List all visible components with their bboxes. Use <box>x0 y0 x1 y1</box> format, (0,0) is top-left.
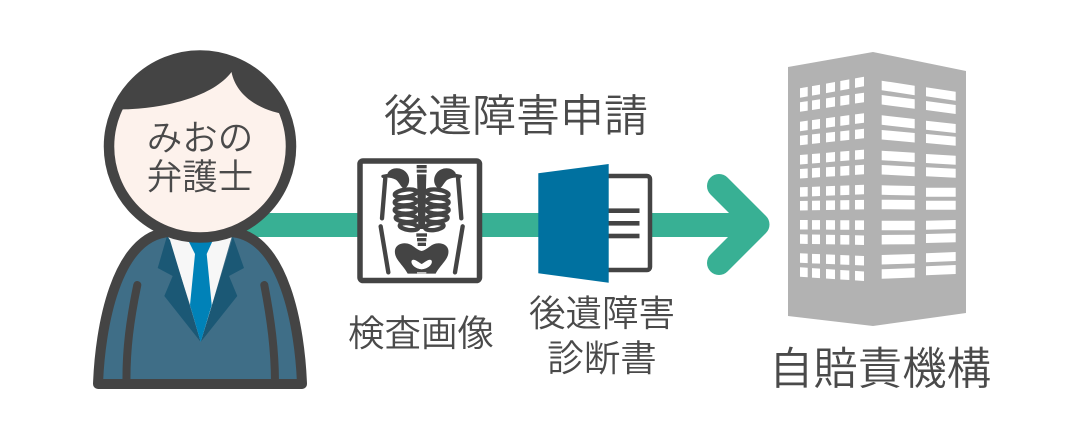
name label <box>147 118 253 197</box>
infographic canvas <box>93 50 990 389</box>
hair <box>122 60 279 114</box>
icon: medical certificate document <box>538 164 650 283</box>
icon: x-ray image <box>360 161 480 280</box>
building windows <box>800 77 956 281</box>
icon: building <box>788 52 966 326</box>
lapels <box>158 236 244 342</box>
label: medical certificate: 後遺障害 <box>529 293 675 334</box>
skeleton <box>381 165 463 274</box>
name label: 弁護士 <box>147 157 253 197</box>
right half <box>425 168 463 272</box>
label: medical certificate <box>529 293 675 379</box>
name label: みおの <box>147 118 253 158</box>
left half <box>381 168 419 272</box>
label: medical certificate: 診断書 <box>547 338 657 379</box>
lawyer body <box>98 232 302 384</box>
head <box>109 56 291 238</box>
label: compulsory insurance organization: 自賠責機構 <box>769 345 991 394</box>
arrow: application flow <box>240 186 758 263</box>
label: x-ray image: 検査画像 <box>348 313 494 354</box>
icon: lawyer <box>98 40 302 384</box>
sleeve lines <box>126 285 275 384</box>
necktie <box>188 240 213 342</box>
heading: 後遺障害申請 <box>384 92 648 141</box>
shirt <box>168 236 232 342</box>
